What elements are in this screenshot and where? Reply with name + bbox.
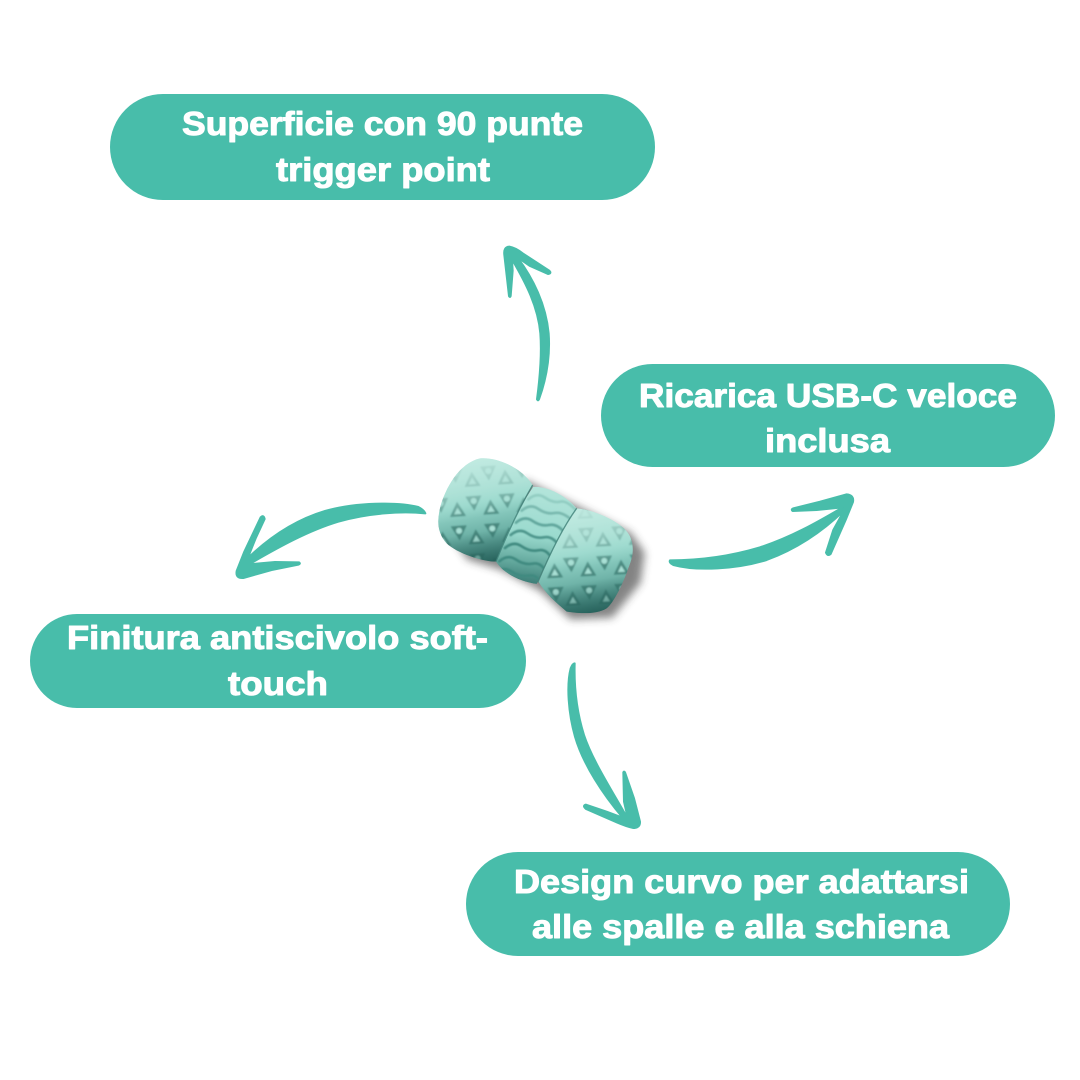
pill: superficie con 90 punte: Superficie con 90 punte (182, 106, 583, 143)
pill: design curvo: Design curvo per adattarsi (514, 864, 969, 901)
pill: superficie con 90 punte (110, 94, 655, 200)
arrow: up to superficie (504, 247, 550, 400)
arrow: down to design (568, 663, 640, 828)
roller middle segment (495, 487, 577, 584)
pill: finitura antiscivolo: touch (228, 666, 328, 703)
pill: finitura antiscivolo: Finitura antiscivolo soft- (67, 620, 488, 657)
roller shadow (444, 479, 645, 619)
arrow: right to ricarica (670, 494, 853, 569)
pill: ricarica USB-C (601, 364, 1055, 467)
pill: design curvo: alle spalle e alla schiena (532, 909, 949, 946)
pill: superficie con 90 punte: trigger point (276, 152, 490, 189)
arrow: left to finitura (236, 504, 425, 578)
pill: ricarica USB-C: Ricarica USB-C veloce (639, 378, 1017, 415)
pill: finitura antiscivolo (30, 614, 526, 708)
pill: ricarica USB-C: inclusa (765, 423, 890, 460)
pill: design curvo (466, 852, 1010, 956)
roller right ball (538, 508, 633, 614)
roller seams (496, 485, 577, 583)
product: massage roller (433, 453, 645, 619)
roller left ball (438, 458, 532, 562)
